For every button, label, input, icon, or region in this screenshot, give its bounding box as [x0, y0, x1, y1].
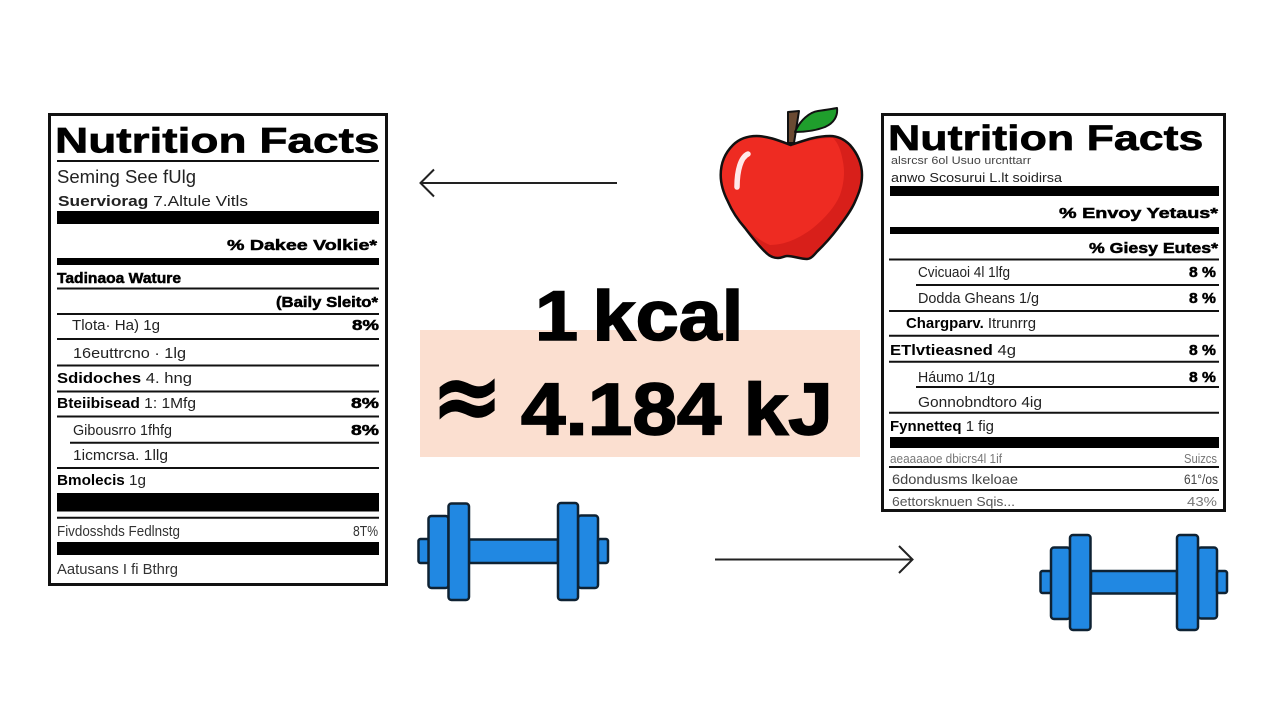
heading: 1 kcal: 1 kcal [535, 276, 743, 355]
right label title: Nutrition Facts [888, 118, 1203, 158]
left serving size text: Seming See fUlg [57, 167, 196, 187]
right row: second item: Dodda Gheans 1/g [918, 290, 1039, 307]
icon: red apple [721, 108, 862, 259]
heading: 4.184 kJ: 4.184 kJ [521, 370, 833, 451]
right value: calcium: 8 % [1189, 264, 1216, 281]
left row: sucrose: 1icmcrsa. 1llg [73, 447, 168, 464]
left row: glucose: Gibousrro 1fhfg [73, 422, 172, 439]
right row: faint footer: aeaaaaoe dbicrs4l 1if [890, 451, 1002, 466]
left value: second bold item: 8% [351, 395, 379, 412]
left row: protein: Bmolecis 1g [57, 472, 146, 489]
apple outline [721, 136, 862, 259]
left value: footer one: 8T% [353, 523, 378, 540]
right row: fourth item: Gonnobndtoro 4ig [918, 394, 1042, 411]
right row: bold item: Chargparv. Itrunrrg [906, 315, 1036, 332]
panel: conversion highlight band [420, 330, 860, 457]
left row: footer two: Aatusans I fi Bthrg [57, 561, 178, 578]
left row: second bold item: Bteiibisead 1: 1Mfg [57, 395, 196, 412]
icon: left dumbbell [418, 503, 608, 600]
right value: footer three: 43% [1187, 494, 1217, 509]
apple stem [788, 111, 799, 143]
right row: calcium: Cvicuaoi 4l 1lfg [918, 264, 1010, 281]
right value: third item: 8 % [1189, 369, 1216, 386]
left value: glucose: 8% [351, 422, 379, 439]
panel: right nutrition label [882, 114, 1224, 510]
icon: right dumbbell [1040, 535, 1227, 630]
apple highlight [737, 154, 748, 187]
left value: total: 8% [352, 317, 379, 334]
right percent value heading: % Envoy Yetaus* [1059, 205, 1218, 222]
right row: second bold item: ETlvtieasned 4g [890, 342, 1016, 359]
right value: second bold item: 8 % [1189, 342, 1216, 359]
right serving text: anwo Scosurui L.lt soidirsa [891, 170, 1063, 185]
right row: third item: Háumo 1/1g [918, 369, 995, 386]
left row heading: Tadinaoa Wature [57, 270, 181, 287]
left percent value heading: % Dakee Volkie* [227, 237, 377, 254]
left row: total: Tlota· Ha) 1g [72, 317, 160, 334]
left row: bold item: Sdidoches 4. hng [57, 370, 192, 387]
left row: footer one: Fivdosshds Fedlnstg [57, 523, 180, 540]
right small print line: alsrcsr 6ol Usuo urcnttarr [891, 155, 1031, 167]
right daily value subheading: % Giesy Eutes* [1089, 240, 1218, 257]
left servings text: Suerviorag 7.Altule Vitls [58, 193, 248, 210]
arrow: pointing right to dumbbell [715, 546, 912, 573]
left label title: Nutrition Facts [55, 121, 379, 160]
right row: footer two: 6dondusms lkeloae [892, 471, 1018, 487]
left row: sub item: 16euttrcno · 1lg [73, 345, 186, 362]
apple lighter face [722, 137, 844, 245]
left daily value subheading: (Baily Sleito* [276, 294, 378, 311]
right value: second item: 8 % [1189, 290, 1216, 307]
right row: footer three: 6ettorsknuen Sqis... [892, 494, 1015, 509]
arrow: pointing left to left label [420, 170, 617, 196]
apple leaf [795, 108, 837, 132]
panel: left nutrition label [50, 114, 386, 584]
right value: footer two: 61°/os [1184, 471, 1218, 487]
right value: faint footer: Suizcs [1184, 451, 1217, 466]
right row: third bold item: Fynnetteq 1 fig [890, 418, 994, 435]
heading: approximately equal sign: ≈ [431, 340, 503, 452]
apple body [721, 136, 862, 259]
